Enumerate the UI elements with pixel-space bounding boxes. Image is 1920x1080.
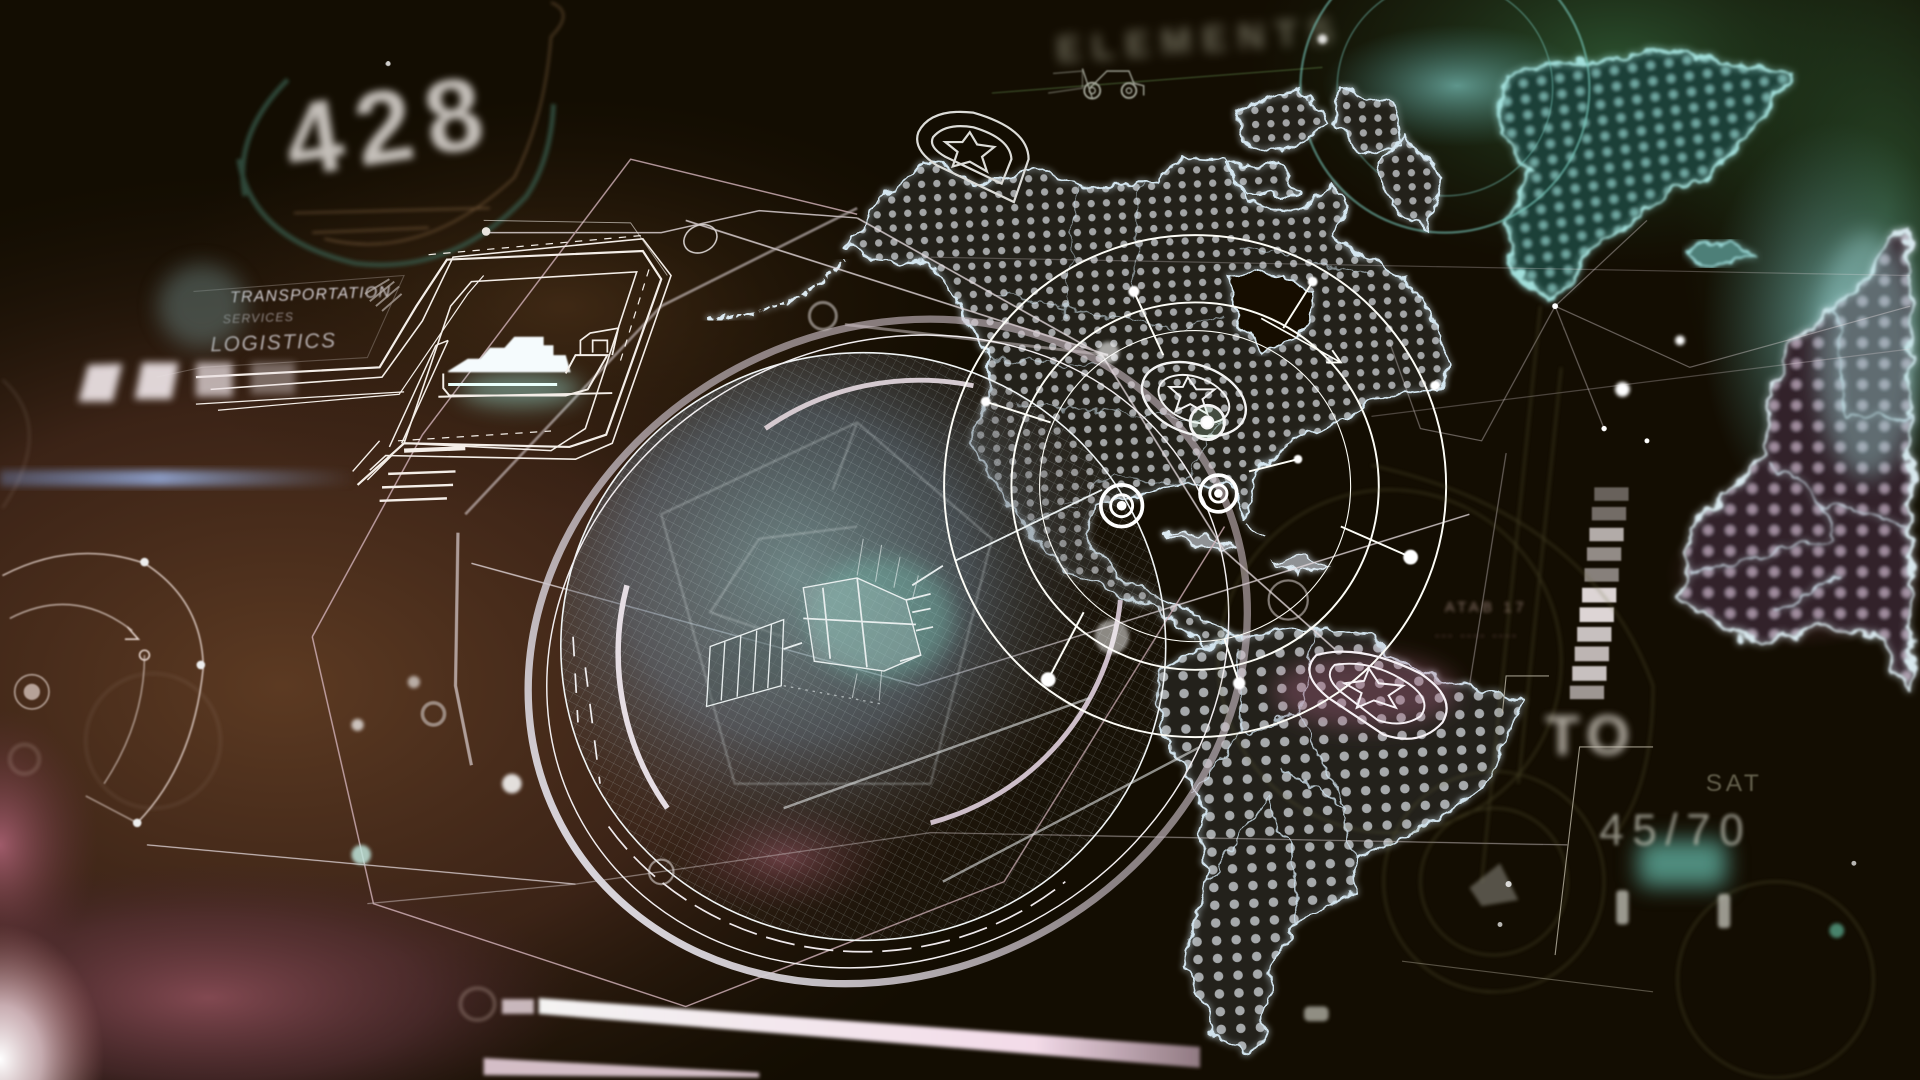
location marker: Gulf xyxy=(1101,485,1142,527)
hollow ring nodes xyxy=(422,219,1308,884)
label: logistics: LOGISTICS xyxy=(210,329,337,356)
blurred label: ATAB 17: ATAB 17 xyxy=(1445,600,1527,616)
blurred grid column xyxy=(1218,306,1873,1078)
icon: ship xyxy=(438,328,618,407)
disc: interior polygon lines xyxy=(661,422,992,784)
blurred label: ATAB 17: --- ---- ---- xyxy=(1435,628,1519,642)
location marker: South America star badge xyxy=(1309,652,1447,739)
segmented level bar xyxy=(1570,487,1629,699)
radar circle overlay xyxy=(944,235,1446,737)
location marker: Florida xyxy=(1200,475,1237,512)
ring: teal over Arctic xyxy=(1300,0,1589,233)
blurred label: TO: TO xyxy=(1545,703,1637,766)
map: Greenland xyxy=(1500,51,1790,301)
map: Caribbean xyxy=(1163,524,1330,576)
map: Africa xyxy=(1680,233,1910,698)
map: Africa teal haze xyxy=(1816,233,1919,478)
blurred label: ATAB 17 xyxy=(1435,600,1527,642)
radar nodes xyxy=(981,277,1440,689)
panel: label frame and hatch xyxy=(157,276,404,377)
panel: bars under xyxy=(404,448,465,451)
blur: teal smudge behind labels xyxy=(158,264,246,348)
label: transportation: TRANSPORTATION xyxy=(230,284,391,306)
blurred segmented bars xyxy=(78,362,295,402)
map: Aleutian islands xyxy=(704,263,845,316)
icon: satellite xyxy=(707,490,1102,707)
map: South America xyxy=(1157,627,1524,1058)
satellite dish ring xyxy=(411,195,1365,1080)
map: Hudson Bay xyxy=(1228,272,1313,350)
satellite stat teal glow xyxy=(1638,840,1727,887)
callout corner lines xyxy=(1402,676,1653,992)
map: province lines xyxy=(986,184,1371,527)
location marker: US star badge xyxy=(1132,349,1256,450)
blurred heading: ELEMENTS: ELEMENTS xyxy=(1055,9,1345,70)
map: country lines xyxy=(1194,627,1353,924)
map: North America xyxy=(704,86,1451,649)
panel: node dot xyxy=(482,227,490,236)
icon: forklift xyxy=(992,67,1322,99)
label: SAT: SAT xyxy=(1706,770,1763,797)
blue horizontal streak xyxy=(0,470,355,486)
location marker: Alaska star pin xyxy=(917,112,1029,202)
left radar gauge xyxy=(2,380,220,827)
panel: frame lines xyxy=(211,239,671,470)
small blurred nodes xyxy=(351,34,1856,927)
bright bottom streaks xyxy=(460,988,1200,1078)
ring: outer tilted xyxy=(411,195,1365,1080)
text block: transportation labels xyxy=(210,284,391,356)
blurred ring around stat xyxy=(239,2,563,265)
ship panel xyxy=(196,220,671,501)
label: services: SERVICES xyxy=(222,310,294,326)
blurred stat: 428: 428 xyxy=(277,52,504,199)
stat: 45/70: 45/70 xyxy=(1599,806,1752,855)
green spot xyxy=(1829,923,1844,938)
map: Brazil pink tint xyxy=(1273,655,1457,729)
disc: hatched center xyxy=(561,353,1166,940)
network lines xyxy=(147,159,1910,1007)
blurred marks beneath stat xyxy=(1304,863,1730,1021)
arcs xyxy=(618,585,667,808)
